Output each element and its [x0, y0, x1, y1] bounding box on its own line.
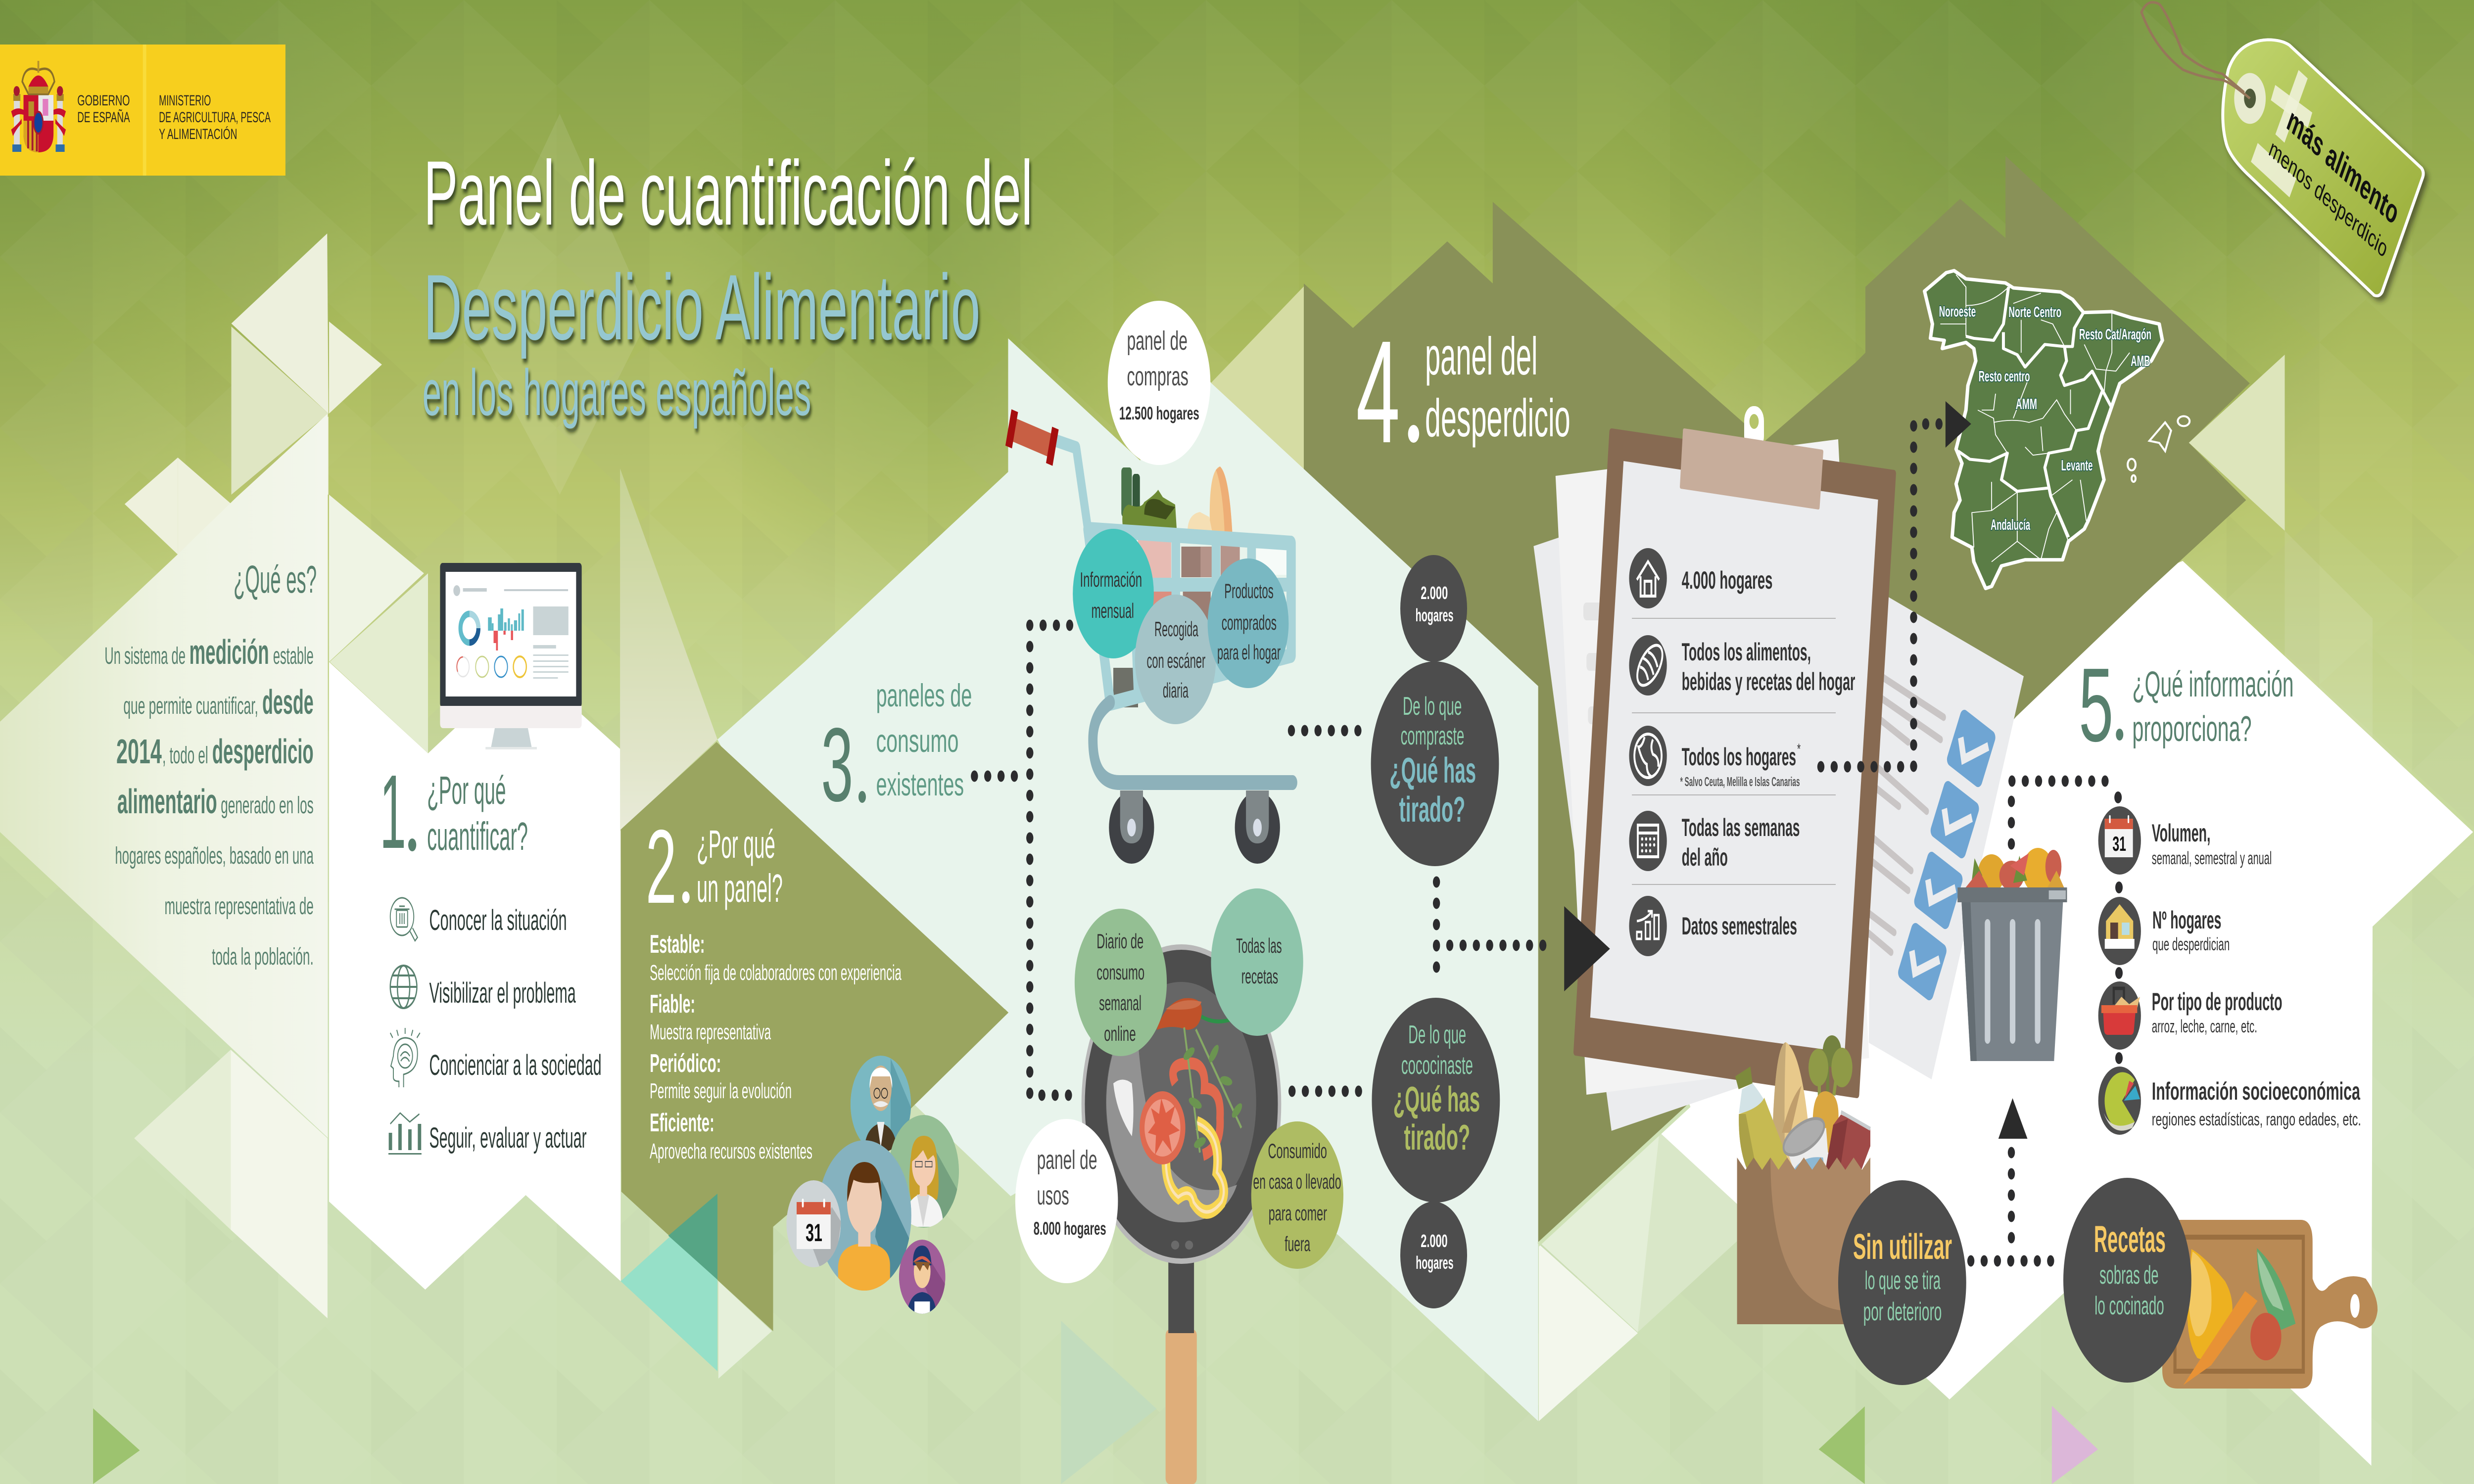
- arrow: to map: [1946, 401, 1971, 448]
- pale triangle near section 4: [1211, 286, 1304, 469]
- logo: Gobierno de España: [0, 45, 285, 176]
- callout: panel de usos: panel de: [1037, 1145, 1097, 1175]
- sheet with checklist: [1865, 589, 2024, 1079]
- illustration: cutting board: [2162, 1220, 2378, 1389]
- icon: people panel: [786, 1056, 959, 1321]
- heading: section 5: [2079, 647, 2294, 764]
- text: Gobierno de España: Y ALIMENTACIÓN: [159, 125, 237, 142]
- callout: panel de usos: [1015, 1119, 1118, 1283]
- callout: 2.000 hogares compras: hogares: [1416, 606, 1453, 625]
- dotted connector: up to info list: [2011, 781, 2118, 844]
- arrow: to clipboard: [1564, 906, 1610, 991]
- callout: 2.000 hogares compras: [1400, 555, 1467, 662]
- text: todos los alimentos: bebidas y recetas del hogar: [1682, 667, 1855, 696]
- heading: section 2: 2: [646, 808, 676, 926]
- callout: información mensual: Información: [1080, 568, 1142, 592]
- text block: qué es: estable: [273, 643, 314, 669]
- icon: calendar: [786, 1180, 841, 1267]
- cart basket: [1088, 529, 1291, 703]
- title: [423, 141, 1033, 429]
- text: Gobierno de España: DE AGRICULTURA, PESCA: [159, 109, 271, 126]
- callout: panel de compras: compras: [1127, 361, 1189, 391]
- map labels: [1939, 304, 2151, 533]
- callout: qué has tirado cocinado: De lo que: [1408, 1020, 1466, 1049]
- callout: productos comprados: [1208, 558, 1288, 688]
- callout: 2.000 hogares cocinado: 2.000: [1421, 1232, 1448, 1251]
- person: main man: [822, 1140, 911, 1291]
- callout: qué has tirado compras: De lo que: [1403, 692, 1462, 721]
- list: por qué cuantificar: [388, 898, 602, 1155]
- icon: trash under magnifier: [390, 898, 418, 941]
- callout: panel de compras: 12.500 hogares: [1119, 403, 1199, 423]
- left pale triangles: [0, 233, 428, 1484]
- oil bottle: [1735, 1067, 1753, 1089]
- map labels: Norte Centro: [2008, 304, 2061, 321]
- pale triangle: [718, 1281, 772, 1379]
- vegetables: [2183, 1248, 2295, 1385]
- callout: recogida con escáner: con escáner: [1147, 649, 1205, 673]
- tag: más alimento menos desperdicio: [2141, 2, 2424, 296]
- icon: coat of arms: [11, 61, 66, 152]
- callout: panel de usos: usos: [1037, 1180, 1069, 1210]
- illustration: frying pan: [1082, 944, 1281, 1484]
- minus sign: [2251, 143, 2296, 197]
- illustration: waste bin: [1957, 848, 2067, 1061]
- text: todas las semanas: del año: [1682, 843, 1728, 871]
- text: todos los alimentos: Todos los alimentos,: [1682, 638, 1811, 666]
- baguette: [1772, 1042, 1812, 1167]
- callout: 2.000 hogares cocinado: hogares: [1416, 1253, 1454, 1273]
- callout: qué has tirado compras: tirado?: [1399, 789, 1465, 830]
- text: Gobierno de España: GOBIERNO: [77, 93, 130, 109]
- callout: todas las recetas: Todas las: [1236, 934, 1282, 958]
- callout: recetas: [2063, 1178, 2191, 1383]
- groceries: [1735, 1035, 1870, 1170]
- icon: globe: [390, 966, 417, 1008]
- map: Spain regions: [1925, 271, 2189, 589]
- callout: sin utilizar: por deterioro: [1863, 1298, 1942, 1326]
- text: volumen: Volumen,: [2152, 819, 2210, 847]
- panel: white background section 1: [329, 662, 620, 1290]
- callout: información mensual: [1073, 529, 1154, 658]
- callout: diario de consumo: consumo: [1096, 961, 1144, 984]
- heading: section 5: ¿Qué información: [2132, 664, 2294, 704]
- text: todas las semanas: [1682, 813, 1800, 871]
- map labels: Levante: [2061, 458, 2093, 474]
- heading: section 4: desperdicio: [1425, 388, 1570, 448]
- text: nº hogares: [2152, 906, 2230, 954]
- heading: section 4: panel del: [1425, 326, 1538, 386]
- arrow: up to bin: [1998, 1098, 2028, 1139]
- text: Gobierno de España: DE ESPAÑA: [77, 108, 130, 126]
- food in pan: [1113, 1079, 1134, 1136]
- text: todos los hogares: *: [1797, 741, 1801, 757]
- tag: más alimento menos desperdicio: menos desperdicio: [2266, 134, 2391, 263]
- text: por tipo de producto: [2152, 987, 2282, 1036]
- text block: por qué un panel: Selección fija de colaboradores con experiencia: [650, 960, 902, 985]
- callout: 2.000 hogares compras: 2.000: [1421, 584, 1448, 603]
- text: nº hogares: Nº hogares: [2152, 906, 2221, 934]
- checkboxes: [1897, 707, 1997, 1003]
- clipboard clip: [1681, 430, 1822, 508]
- teal triangle: [620, 1194, 717, 1371]
- callout: recetas: Recetas: [2094, 1219, 2166, 1260]
- panel: olive background section 4: [1304, 156, 2250, 1243]
- icon: house: [2098, 897, 2141, 965]
- pale triangle behind section 2: [620, 468, 717, 831]
- text: todos los alimentos: [1682, 638, 1855, 696]
- text: visibilizar: Visibilizar el problema: [429, 977, 576, 1009]
- callout: consumido en casa: para comer: [1269, 1202, 1327, 1225]
- callout: diario de consumo: Diario de: [1096, 930, 1143, 953]
- text block: qué es: alimentario: [117, 783, 217, 821]
- text block: qué es: que permite cuantificar,: [123, 693, 258, 719]
- heading: section 3: [821, 678, 972, 824]
- callout: productos comprados: comprados: [1222, 611, 1277, 635]
- food in cart: [1113, 466, 1287, 707]
- panel: section 2 olive: [620, 742, 1008, 1379]
- callout: qué has tirado cocinado: cococinaste: [1401, 1051, 1473, 1080]
- cart wheels: [1109, 790, 1280, 864]
- carrot with greens: [1823, 1035, 1841, 1096]
- list: qué información proporciona: [2098, 806, 2361, 1135]
- callout: qué has tirado cocinado: tirado?: [1404, 1117, 1470, 1158]
- map labels: Andalucía: [1991, 517, 2031, 533]
- callout: recogida con escáner: diaria: [1163, 679, 1189, 702]
- map labels: Resto centro: [1979, 369, 2030, 385]
- text: todos los hogares: Todos los hogares: [1682, 742, 1796, 771]
- text block: qué es: , todo el: [162, 742, 208, 769]
- heading: section 1: ¿Por qué: [427, 769, 506, 813]
- red can: [1825, 1114, 1870, 1170]
- text block: por qué un panel: [650, 930, 902, 1163]
- icon: calendar: 31: [806, 1218, 822, 1247]
- heading: section 5: proporciona?: [2132, 709, 2252, 749]
- panel: white background section 5: [1546, 561, 2473, 1466]
- callout: todas las recetas: recetas: [1241, 965, 1278, 988]
- person: older man: [850, 1056, 911, 1151]
- icon: bread: [1629, 635, 1667, 696]
- plus sign: [2263, 58, 2320, 154]
- text block: qué es: 2014: [116, 733, 162, 771]
- heading: section 3: paneles de: [876, 678, 972, 713]
- text block: qué es: generado en los: [221, 792, 314, 819]
- map labels: AMB: [2131, 353, 2150, 370]
- callout: sin utilizar: [1838, 1180, 1966, 1385]
- pale diamond below section 4: [1539, 1132, 1737, 1421]
- map labels: Resto Cat/Aragón: [2079, 326, 2151, 343]
- heading: section 5: 5: [2079, 647, 2113, 764]
- text block: por qué un panel: Permite seguir la evolución: [650, 1078, 792, 1103]
- clipboard ring: [1744, 406, 1764, 451]
- heading: section 2: ¿Por qué: [697, 823, 775, 867]
- callout: recetas: lo cocinado: [2094, 1292, 2164, 1320]
- callout: información mensual: mensual: [1092, 600, 1134, 623]
- text: todos los hogares: [1680, 741, 1801, 789]
- callout: panel de compras: panel de: [1127, 325, 1188, 356]
- bottom triangles: [1061, 1321, 2098, 1484]
- callout: qué has tirado compras: [1371, 661, 1499, 866]
- pale triangle right of section 4: [2189, 355, 2285, 531]
- dotted connector: clipboard to map: [1821, 424, 1942, 767]
- callout: diario de consumo: online: [1104, 1022, 1136, 1046]
- text block: qué es: hogares españoles, basado en una: [115, 843, 314, 869]
- cart handle: [1055, 440, 1088, 529]
- callout: qué has tirado compras: compraste: [1401, 722, 1464, 750]
- text block: por qué un panel: Periódico:: [650, 1049, 721, 1078]
- title: Desperdicio Alimentario: [424, 256, 980, 360]
- callout: diario de consumo: [1075, 909, 1167, 1056]
- dotted connector: section 3 to panels: [974, 625, 1070, 1095]
- heading: section 1: 1: [380, 753, 406, 871]
- heading: section 2: [646, 808, 783, 926]
- dotted connector: to bin: [1971, 1153, 2053, 1261]
- icon: head with brain: [390, 1028, 420, 1087]
- dotted connector: pan to question: [1292, 1085, 1361, 1097]
- icon: calendar: [2098, 806, 2141, 875]
- person: woman: [889, 1115, 959, 1228]
- callout: sin utilizar: Sin utilizar: [1853, 1227, 1952, 1267]
- dotted connector: cart to question: [1291, 725, 1361, 736]
- text block: qué es: Un sistema de: [104, 643, 186, 669]
- icon: growth chart: [1629, 896, 1667, 956]
- text: seguir: Seguir, evaluar y actuar: [429, 1122, 587, 1154]
- text block: qué es: muestra representativa de: [164, 893, 314, 920]
- text: por tipo de producto: Por tipo de producto: [2152, 987, 2282, 1016]
- heading: section 4: [1356, 311, 1570, 474]
- heading: section 2: un panel?: [697, 867, 783, 911]
- heading: ¿Qué es?: ¿Qué es?: [234, 557, 317, 601]
- callout: panel de usos: 8.000 hogares: [1034, 1218, 1106, 1239]
- icon: chart: [388, 1113, 422, 1155]
- icon: shopping basket: [2098, 981, 2141, 1050]
- dots: between info icons: [2114, 791, 2123, 1064]
- callout: recogida con escáner: [1135, 595, 1216, 724]
- sheets behind clipboard: [1533, 439, 2024, 1131]
- dotted connector: questions to clipboard: [1436, 882, 1556, 988]
- title: en los hogares españoles: [423, 356, 811, 429]
- text: información socioeconómica: [2152, 1077, 2361, 1129]
- text block: por qué un panel: Fiable:: [650, 990, 695, 1019]
- text: nº hogares: que desperdician: [2152, 935, 2230, 954]
- text: Gobierno de España: [77, 93, 271, 142]
- illustration: shopping cart: [1005, 409, 1292, 864]
- paper bag: [1737, 1158, 1870, 1324]
- callout: 2.000 hogares cocinado: [1400, 1202, 1467, 1308]
- panel: mint background section 3: [717, 334, 1538, 1421]
- text block: qué es: desde: [262, 683, 314, 722]
- text: datos semestrales: Datos semestrales: [1682, 912, 1797, 940]
- callout: qué has tirado cocinado: [1372, 998, 1500, 1203]
- can: [1784, 1128, 1829, 1170]
- food in bin: [1965, 848, 2064, 893]
- map labels: Noroeste: [1939, 304, 1976, 320]
- text: conocer: Conocer la situación: [429, 904, 567, 936]
- clipboard: [1575, 406, 1894, 1095]
- callout: todas las recetas: [1211, 888, 1303, 1036]
- person: boy: [899, 1240, 945, 1314]
- text: información socioeconómica: regiones estadísticas, rango edades, etc.: [2152, 1110, 2361, 1129]
- callout: sin utilizar: lo que se tira: [1865, 1266, 1941, 1295]
- callout: consumido en casa: [1251, 1121, 1343, 1269]
- callout: panel de compras: [1108, 301, 1210, 465]
- callout: productos comprados: Productos: [1224, 580, 1274, 603]
- callout: qué has tirado compras: ¿Qué has: [1389, 750, 1476, 790]
- text block: por qué un panel: Aprovecha recursos existentes: [650, 1139, 812, 1163]
- pale edge of section 4: [1538, 1105, 1690, 1245]
- heading: section 1: [380, 753, 528, 871]
- text block: por qué un panel: Eficiente:: [650, 1109, 714, 1137]
- text block: qué es: [104, 633, 314, 970]
- icon: world: [1629, 726, 1667, 786]
- callout: productos comprados: para el hogar: [1217, 641, 1281, 664]
- heading: section 3: 3: [821, 706, 853, 824]
- text block: qué es: desperdicio: [212, 733, 314, 771]
- heading: section 1: cuantificar?: [427, 815, 528, 859]
- title: Panel de cuantificación del: [424, 141, 1033, 244]
- icon: calendar: [1629, 811, 1667, 871]
- tag text: más alimento: [2283, 101, 2403, 232]
- text block: qué es: medición: [189, 633, 269, 672]
- text: todos los hogares: * Salvo Ceuta, Melilla e Islas Canarias: [1680, 774, 1800, 789]
- text: Gobierno de España: MINISTERIO: [159, 93, 211, 109]
- callout: recetas: sobras de: [2099, 1261, 2159, 1290]
- callout: consumido en casa: Consumido: [1268, 1140, 1327, 1163]
- cart frame: [1093, 702, 1292, 783]
- callout: qué has tirado cocinado: ¿Qué has: [1393, 1079, 1480, 1119]
- text: 4.000 hogares: 4.000 hogares: [1682, 566, 1772, 594]
- text block: qué es: toda la población.: [212, 944, 314, 970]
- text: información socioeconómica: Información socioeconómica: [2152, 1077, 2361, 1105]
- map labels: AMM: [2016, 396, 2037, 413]
- icon: house: [1629, 548, 1667, 608]
- icon: pie chart: [2098, 1067, 2141, 1135]
- callout: consumido en casa: en casa o llevado: [1253, 1170, 1341, 1194]
- illustration: grocery bag: [1735, 1035, 1870, 1324]
- text: todas las semanas: Todas las semanas: [1682, 813, 1800, 841]
- text block: por qué un panel: Muestra representativa: [650, 1020, 771, 1044]
- callout: diario de consumo: semanal: [1099, 992, 1142, 1015]
- heading: section 3: consumo: [876, 723, 958, 759]
- icon: calendar: 31: [2112, 833, 2126, 856]
- text block: por qué un panel: Estable:: [650, 930, 705, 959]
- heading: section 3: existentes: [876, 767, 964, 802]
- callout: recogida con escáner: Recogida: [1154, 618, 1198, 641]
- text: volumen: [2152, 819, 2272, 868]
- text: concienciar: Concienciar a la sociedad: [429, 1049, 602, 1081]
- callout: consumido en casa: fuera: [1285, 1233, 1310, 1256]
- icon: monitor dashboard: [440, 563, 582, 749]
- text: volumen: semanal, semestral y anual: [2152, 849, 2272, 868]
- text: por tipo de producto: arroz, leche, carne, etc.: [2152, 1017, 2257, 1036]
- heading: section 4: 4: [1356, 311, 1400, 474]
